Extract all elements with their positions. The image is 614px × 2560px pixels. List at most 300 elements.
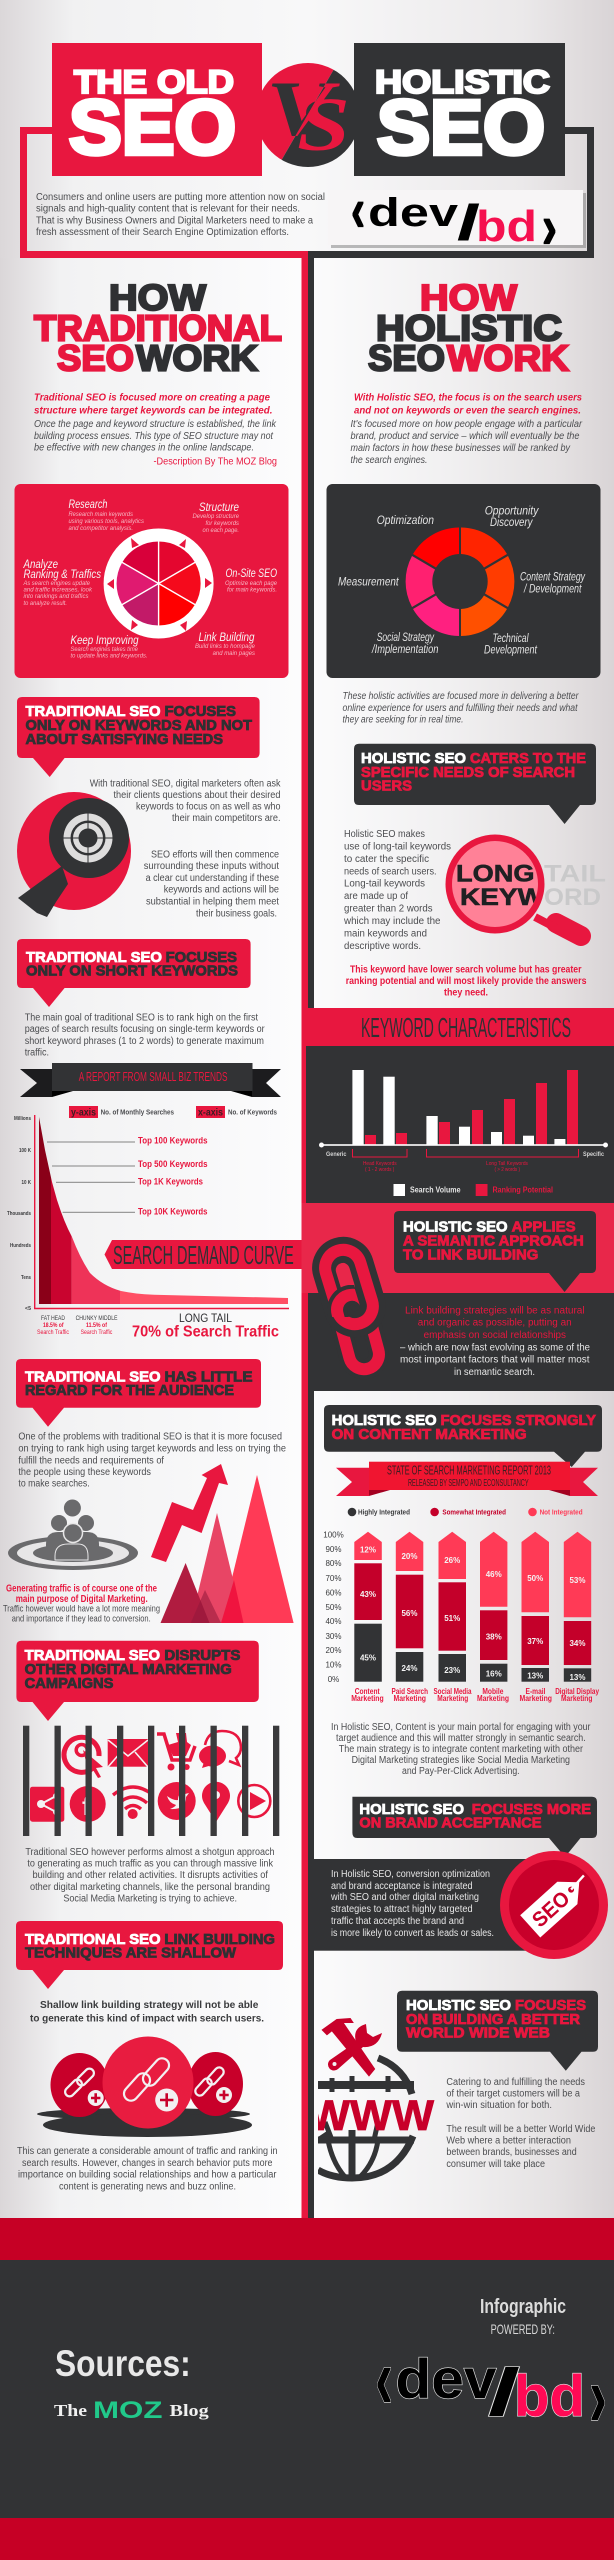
text: link building strategies: in semantic search. [454,1367,535,1378]
callout: traditional SEO focuses only on keywords: FOCUSES [164,704,236,720]
callout: holistic SEO caters to specific needs: HOLISTIC SEO [361,751,466,767]
text: audience problem: on trying to rank high using target keywords and less on trying the [18,1444,286,1454]
bar: e-mail marketing: 50% [527,1574,543,1583]
y axis labels: Millions [14,1116,31,1122]
footer logo: dev/bd: / [488,2355,520,2429]
pie chart wheel [104,528,214,638]
bar: mobile marketing [477,1532,509,1703]
text: audience problem: One of the problems with traditional SEO is that it is more focused [18,1432,282,1442]
text: long-tail explanation: greater than 2 words [344,904,433,914]
x axis segment labels: 11.5% of [86,1323,108,1329]
callout: traditional SEO focuses only on keywords: TRADITIONAL SEO [26,704,160,720]
y axis labels: Thousands [7,1211,31,1217]
text: long-tail conclusion: This keyword have lower search volume but has greater [350,964,582,976]
label: structure: Structure [199,502,239,514]
text: long-tail explanation: descriptive words. [344,941,421,952]
hammer and wrench [323,2019,382,2075]
text: audience problem: the people using these keywords [18,1467,151,1478]
text: shotgun approach [25,1847,275,1904]
text: audience problem [18,1432,286,1490]
text: traffic and rankings: search results. However, changes in search behavior puts more [22,2158,273,2169]
text: shallow link building: Shallow link building strategy will not be able [40,1999,259,2011]
bar: digital display marketing: Marketing [561,1694,592,1703]
donut labels: Discovery [490,517,534,529]
icon: globe, tools and www [308,2019,434,2178]
text: conversion optimization: and brand acceptance is integrated [331,1881,473,1892]
text: holistic SEO description: It's focused more on how people engage with a particular [350,419,583,430]
text: shotgun approach: other digital marketing channels, like the personal branding [30,1882,270,1893]
label: structure: for keywords [206,520,240,527]
title: holistic SEO [354,43,565,176]
title: VS badge: S [297,83,350,167]
bar: paid search marketing: 56% [401,1609,418,1618]
logo card: dev/bd [328,176,586,262]
text: traditional SEO description: structure where target keywords can be integrated. [34,404,273,416]
chart legend [348,1508,583,1517]
bar: social media marketing: Social Media [434,1687,472,1696]
title: the old SEO: SEO [69,85,236,171]
chart legend: Somewhat Integrated [442,1510,506,1517]
text: holistic SEO description: With Holistic SEO, the focus is on the search users [354,392,582,404]
chart legend: Highly Integrated [358,1510,410,1517]
footer logo: dev/bd [375,2328,607,2445]
text: shotgun approach: building and other related activities. It disrupts activities of [32,1870,268,1881]
icon: SEO price tag: SEO [528,1887,575,1932]
text: traditional SEO description: building process ensues. This type of SEO structure may not [34,431,274,442]
text: generating traffic: Generating traffic is of course one of the [6,1584,157,1594]
label: link building: Build links to hompage [195,643,255,650]
label: link building: and main pages [213,650,256,657]
bar: mobile marketing: 46% [486,1570,502,1579]
label: research: Research main keywords [68,511,134,518]
text: long-tail explanation: use of long-tail keywords [344,842,451,852]
bar: paid search marketing: 24% [401,1664,418,1673]
bar: content marketing: Marketing [351,1694,384,1703]
intro text: That is why Business Owners and Digital Marketers need to make a [36,216,313,226]
text: conversion optimization: with SEO and other digital marketing [330,1892,479,1903]
text: keywords explanation: their business goals. [196,908,277,920]
callout: traditional SEO link building shallow: TRADITIONAL SEO [25,1932,160,1948]
label: keep improving: Keep Improving [70,635,139,647]
text: link building strategies: – which are now fast evolving as some of the [400,1342,590,1354]
logo card: dev/bd: ‹ [351,176,365,245]
callout: traditional SEO disrupts campaigns: TRADITIONAL SEO [25,1648,160,1664]
powered by [480,2296,566,2337]
axis labels [326,1151,604,1173]
text: better web [445,2077,596,2170]
callout: holistic SEO applies a semantic approach: HOLISTIC SEO [403,1220,508,1236]
callout: traditional SEO focuses only on keywords: ABOUT SATISFYING NEEDS [26,732,223,748]
text: short keywords explanation: traffic. [25,1048,49,1058]
keyword tier labels: Top 100 Keywords [138,1136,208,1146]
label: research: using various tools, analytics [68,518,145,525]
search volume bars [352,1070,565,1145]
logo card: dev/bd: dev [368,191,459,235]
text: shallow link building: to generate this kind of impact with search users. [30,2012,264,2024]
label: keep improving [70,635,148,660]
axis labels: ( > 2 words ) [494,1167,520,1173]
www: WWW [308,2092,434,2140]
text: traditional SEO description: be effective with new changes in the online landscape. [34,442,254,454]
y axis percent labels: 50% [325,1603,342,1612]
title: the old SEO [52,43,262,176]
heading: how holistic SEO work [368,277,569,378]
icon: share card [30,1787,64,1822]
text: holistic activities: they are seeking for in real time. [342,714,464,726]
callout: holistic SEO focuses on content marketing: ON CONTENT MARKETING [332,1427,527,1443]
text: better web: Web where a better interaction [446,2136,571,2146]
bar: digital display marketing: Digital Display [555,1687,599,1696]
bar: content marketing: 43% [360,1590,376,1599]
bar: content marketing [351,1532,384,1703]
text: short keywords explanation: The main goal of traditional SEO is to rank high on the first [25,1012,258,1024]
text: conversion optimization: is more likely to convert as leads or sales. [331,1928,494,1939]
y axis percent labels: 30% [325,1632,342,1641]
text: shallow link building [30,1999,264,2024]
callout: holistic SEO caters to specific needs: CATERS TO THE [470,751,586,767]
label: research: and competitor analysis. [68,525,133,532]
bar: social media marketing: 23% [444,1666,460,1675]
y axis percent labels: 60% [325,1588,342,1598]
callout: traditional SEO focuses on short keywords [17,939,251,1007]
bar: content marketing: Content [355,1687,380,1696]
icon: chat bubbles [199,1731,241,1768]
label: keep improving: to update links and keywords. [70,652,148,660]
label: structure: Develop structure [192,513,239,520]
callout: holistic SEO caters to specific needs: SPECIFIC NEEDS OF SEARCH [361,765,575,781]
footer [0,2218,614,2560]
text: long-tail explanation: main keywords and [344,928,427,940]
label: analyze ranking and traffics: Ranking & Traffics [24,569,101,581]
text: link building strategies: most important factors that will matter most [400,1354,590,1366]
text: better web: of their target customers will be a [446,2088,580,2100]
donut labels: Social Strategy [377,632,435,644]
text: keywords explanation [90,778,281,920]
chart legend: Not Integrated [540,1510,583,1517]
icon: long tail keyword magnifier: ORD [544,884,601,911]
text: long-tail conclusion: they need. [444,988,488,998]
label: analyze ranking and traffics [23,559,101,607]
long tail label: 70% of Search Traffic [132,1324,279,1340]
text: content marketing: target audience and this will matter strongly in semantic search. [336,1733,586,1744]
x axis segment labels: 18.5% of [43,1323,64,1329]
intro text: Consumers and online users are putting more attention now on social [36,192,325,203]
callout: traditional SEO focuses on short keywords: TRADITIONAL SEO [26,950,162,966]
text: long-tail explanation: Holistic SEO makes [344,829,425,840]
text: content marketing: The main strategy is to integrate content marketing with other [339,1744,584,1755]
logo card: dev/bd: / [458,197,479,250]
label: on-site SEO: for main keywords. [227,586,277,594]
text: keywords explanation: With traditional SEO, digital marketers often ask [90,778,281,790]
title: VS badge [262,63,354,167]
donut chart [406,528,514,636]
text: shotgun approach: to generating as much traffic as you can through massive link [27,1858,274,1870]
text: better web: The result will be a better World Wide [446,2124,596,2135]
keyword tier labels: Top 1K Keywords [138,1176,203,1186]
label: analyze ranking and traffics: into rankings and traffics [24,593,89,600]
callout: holistic SEO focuses on content marketing: FOCUSES STRONGLY [440,1413,596,1429]
donut labels [338,506,586,656]
bar: digital display marketing: 13% [569,1673,586,1682]
text: keywords explanation: their clients questions about their desired [114,790,280,801]
text: long-tail conclusion: ranking potential and will most likely provide the answers [346,976,587,987]
callout: traditional SEO has little regard [16,1359,261,1427]
x axis segment labels [37,1316,118,1336]
text: keywords explanation: SEO efforts will then commence [151,850,279,860]
keyword leader lines [47,1142,135,1212]
title: VS badge: V [266,65,341,152]
keyword tier labels: Top 500 Keywords [138,1159,208,1169]
donut labels: Opportunity [485,506,540,518]
title: holistic SEO: HOLISTIC [375,64,550,100]
title: the old SEO: THE OLD [74,64,234,100]
chart legend: axes: No. of Keywords [228,1108,277,1116]
text: better web: win-win situation for both. [445,2100,552,2111]
icon: cart [157,1733,195,1770]
bar: e-mail marketing: Marketing [520,1694,552,1703]
callout: traditional SEO link building shallow [16,1921,283,1989]
axis labels: Long Tail Keywords [486,1161,528,1167]
text: content marketing: and Pay-Per-Click Advertising. [402,1766,520,1777]
callout: holistic SEO applies a semantic approach: TO LINK BUILDING [403,1247,538,1263]
icon: map pin [202,1782,230,1822]
text: keywords explanation: their main competitors are. [172,813,280,824]
callout: holistic SEO focuses on content marketing [324,1405,602,1467]
heading: how holistic SEO work: WORK [447,338,569,378]
source: the moz blog: The [54,2401,88,2420]
source: the moz blog: MOZ [93,2397,162,2424]
callout: holistic SEO caters to specific needs [354,744,596,824]
text: traditional SEO description: -Description By The MOZ Blog [154,456,277,468]
text: better web: consumer will take place [446,2159,545,2170]
bar: e-mail marketing: 13% [527,1672,543,1680]
text: holistic SEO description: the search engines. [350,455,428,466]
powered by: Infographic [480,2296,566,2318]
text: holistic SEO description: main factors in how these businesses will be ranked by [350,443,571,454]
bar: paid search marketing [392,1532,428,1703]
panel: brand acceptance [308,1851,608,1959]
heading: how traditional SEO work: SEO [57,338,134,378]
text: link building strategies: Link building strategies will be as natural [405,1306,585,1316]
bar: paid search marketing: Marketing [394,1694,426,1703]
icon: chain link [321,1245,382,1373]
icon: long tail keyword magnifier: LONG [456,861,534,888]
chart legend: Ranking Potential [492,1186,553,1194]
long tail label [132,1313,279,1340]
label: keep improving: Search engines takes time [70,646,138,653]
ribbon: report from small biz trends [20,1063,281,1097]
text: holistic SEO description: and not on keywords or even the search engines. [354,404,581,416]
chart legend [394,1184,553,1196]
text: long-tail explanation: which may include the [343,916,441,927]
heading: how traditional SEO work: WORK [136,338,258,378]
bar: social media marketing [434,1532,472,1703]
callout: holistic SEO applies a semantic approach [394,1211,596,1292]
y axis percent labels: 90% [325,1545,342,1554]
callout: holistic SEO applies a semantic approach: A SEMANTIC APPROACH [403,1234,584,1250]
y axis percent labels: 100% [323,1530,344,1540]
text: traffic and rankings [17,2146,278,2192]
chart: search demand curve [7,1110,290,1340]
callout: holistic SEO applies a semantic approach: APPLIES [512,1220,576,1236]
donut labels: Development [484,644,538,656]
text: holistic activities: These holistic activities are focused more in delivering a better [342,691,579,702]
label: analyze ranking and traffics: and traffic increases, look [24,586,93,594]
panel: semantic link building [302,1203,614,1391]
y axis percent labels: 0% [328,1675,339,1684]
text: holistic activities [342,691,579,726]
axis labels: ( 1 - 2 words ) [365,1167,395,1173]
text: long-tail explanation: needs of search users. [344,866,437,878]
text: generating traffic: main purpose of Digital Marketing. [16,1594,148,1605]
text: better web: Catering to and fulfilling the needs [446,2077,585,2088]
donut labels: /Implementation [371,644,438,656]
sources heading: Sources: [55,2343,191,2384]
bar: social media marketing: Marketing [437,1694,468,1703]
callout: traditional SEO focuses only on keywords [17,697,260,777]
text: traditional SEO description: Once the page and keyword structure is established, the link [34,419,277,430]
bar: mobile marketing: Marketing [477,1694,509,1703]
y axis percent labels: 70% [325,1574,342,1583]
y axis labels: <5 [25,1306,31,1312]
icon: wifi [113,1787,153,1819]
icon: keyword target magnifier [17,792,131,917]
ribbon: state of search marketing report [336,1462,598,1496]
y axis percent labels: 80% [325,1559,342,1568]
icon: link balloons [37,2036,252,2137]
prison bars [23,1726,279,1836]
text: long-tail explanation [343,829,451,952]
label: link building: Link Building [198,632,255,644]
bar: content marketing: 45% [360,1654,376,1662]
y axis labels: 100 K [19,1148,31,1154]
text: conversion optimization: strategies to attract highly targeted [331,1904,473,1915]
text: short keywords explanation [25,1012,265,1058]
text: keywords explanation: substantial in helping them meet [146,896,279,908]
heading: how traditional SEO work: HOW [109,277,206,318]
text: traditional SEO description [34,392,277,468]
callout: holistic SEO better world wide web: HOLISTIC SEO [406,1998,511,2014]
icon group: marketing channels behind bars [23,1726,279,1836]
text: keywords explanation: a clear cut understanding if these [146,873,279,884]
heading: how holistic SEO work: HOW [420,277,517,318]
text: generating traffic [3,1584,160,1624]
icon: long tail keyword magnifier: KEYW [460,884,544,911]
icon: mail [108,1739,148,1767]
bar: mobile marketing: Mobile [482,1687,504,1696]
text: long-tail explanation: are made up of [344,891,408,902]
axis labels: Head Keywords [363,1161,397,1167]
callout: traditional SEO focuses only on keywords: ONLY ON KEYWORDS AND NOT [26,718,252,734]
icon: people target [8,1500,138,1570]
icon: facebook: f [82,1791,91,1821]
donut labels: Measurement [338,576,399,588]
footer logo: dev/bd: dev [396,2347,496,2410]
callout: traditional SEO disrupts campaigns: CAMPAIGNS [25,1676,114,1692]
y axis percent labels [323,1530,344,1684]
intro text [36,192,325,238]
text: conversion optimization [330,1869,494,1939]
text: holistic activities: online experience for users and fulfilling their needs and what [342,703,579,714]
x axis segment labels: CHUNKY MIDDLE [76,1316,118,1322]
title: holistic SEO: SEO [377,85,545,171]
y axis labels: Hundreds [10,1243,31,1249]
logo card: dev/bd: › [542,193,557,262]
ranking potential bars [365,1070,578,1145]
callout: holistic SEO better world wide web: ON BUILDING A BETTER [406,2012,581,2028]
text: better web: between brands, businesses and [446,2147,577,2158]
text: long-tail conclusion [346,964,587,998]
y axis labels [7,1116,31,1312]
text: traffic and rankings: importance on building social relationships and how a particular [18,2170,277,2180]
text: short keywords explanation: pages of search results focusing on single-term keywords or [25,1024,265,1035]
label: research [68,499,145,532]
text: traffic and rankings: content is generating news and buzz online. [59,2182,236,2192]
icon: play [238,1785,270,1817]
text: holistic SEO description [350,392,583,466]
panel: holistic SEO process donut [326,484,600,678]
callout: traditional SEO link building shallow: TECHNIQUES ARE SHALLOW [25,1946,236,1962]
chart: keyword characteristics bars [306,1046,614,1203]
chart legend: axes: x-axis [198,1108,223,1118]
label: link building [195,632,256,657]
callout: traditional SEO has little regard: TRADITIONAL SEO [25,1370,160,1386]
source: the moz blog: Blog [170,2401,209,2420]
label: on-site SEO: On-Site SEO [226,568,277,580]
chart: integration of marketing channels [323,1508,599,1703]
axis labels: Generic [326,1151,347,1158]
callout: traditional SEO disrupts campaigns: DISRUPTS [164,1648,241,1664]
intro text: signals and high-quality content that is relevant for their needs. [36,204,300,214]
text: traditional SEO description: Traditional SEO is focused more on creating a page [34,392,270,404]
icon: traffic triangles and arrow [151,1464,294,1623]
chart legend: axes: No. of Monthly Searches [101,1108,174,1116]
callout: holistic SEO caters to specific needs: USERS [361,778,412,794]
banner: search demand curve: SEARCH DEMAND CURVE [113,1240,294,1270]
text: content marketing: Digital Marketing strategies like Social Media Marketing [352,1755,570,1766]
bracket lines and central divider [20,127,594,2218]
label: analyze ranking and traffics: As search engines update [23,580,90,587]
bar: paid search marketing: 20% [401,1552,418,1561]
callout: holistic SEO focuses on content marketing: HOLISTIC SEO [332,1413,437,1429]
source: the moz blog [54,2397,209,2424]
callout: traditional SEO has little regard: REGARD FOR THE AUDIENCE [25,1383,234,1399]
text: short keywords explanation: short keyword phrases (1 to 2 words) to generate maximum [25,1036,264,1047]
text: audience problem: fulfill the needs and requirements of [18,1456,164,1466]
heading: how traditional SEO work: TRADITIONAL [34,308,282,348]
logo card: dev/bd: bd [476,202,537,251]
x axis segment labels: FAT HEAD [41,1316,66,1322]
callout: traditional SEO focuses on short keywords: FOCUSES [166,950,237,966]
label: research: Research [68,499,108,511]
banner: search demand curve [104,1240,302,1270]
y axis labels: 10 K [22,1180,31,1186]
label: on-site SEO [225,568,277,594]
label: analyze ranking and traffics: Analyze [23,559,58,571]
footer logo: dev/bd: ‹ [375,2328,393,2427]
callout: holistic SEO focuses on brand acceptance: HOLISTIC SEO [359,1802,464,1818]
bar: content marketing: 12% [360,1546,376,1554]
text: keywords explanation: keywords and actions will be [164,884,279,896]
donut labels: / Development [523,584,582,596]
label: on-site SEO: Optimize each page [225,580,277,587]
text: long-tail explanation: to cater the specific [344,854,429,865]
icon: twitter [158,1782,196,1820]
y axis percent labels: 20% [325,1646,342,1655]
long tail label: LONG TAIL [179,1313,233,1325]
text: generating traffic: Traffic however would have a lot more meaning [3,1604,160,1614]
text: shotgun approach: Social Media Marketing is trying to achieve. [63,1894,237,1904]
